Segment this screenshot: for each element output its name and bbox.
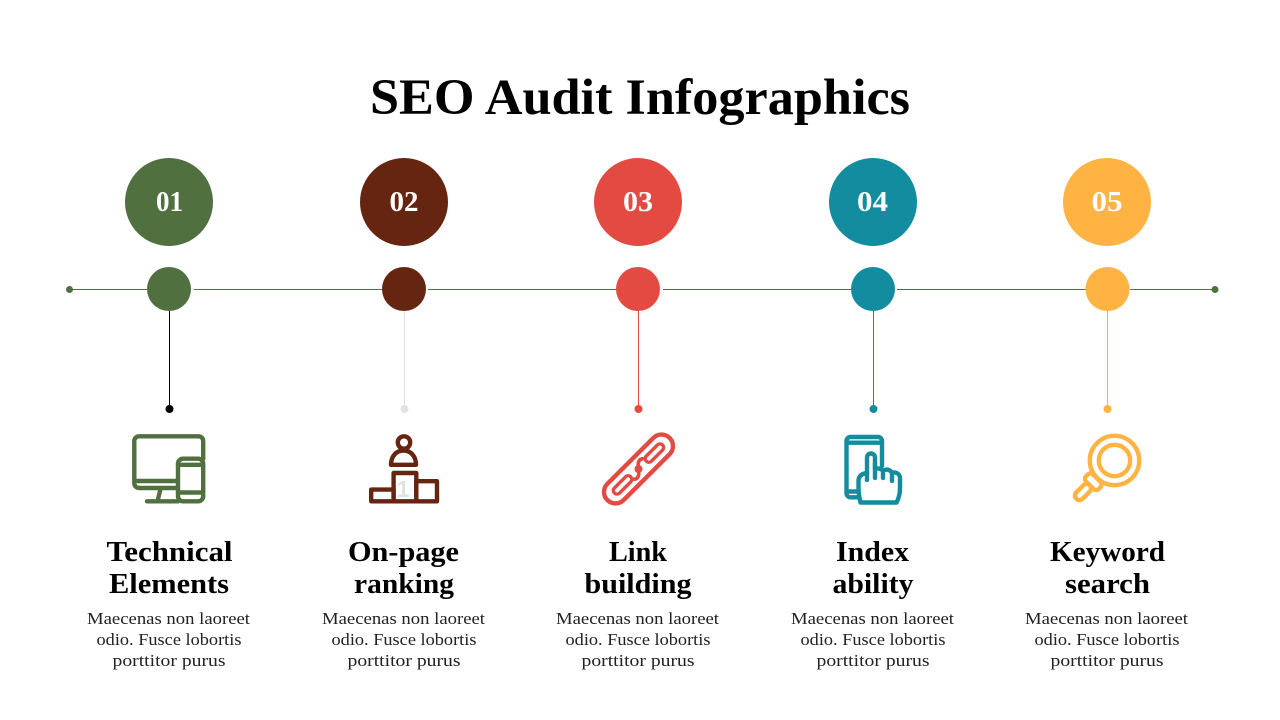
- description 3: [556, 609, 719, 670]
- heading 5: Keyword: [1050, 537, 1165, 568]
- number badge 05: 05: [1092, 186, 1122, 218]
- description 1: porttitor purus: [112, 651, 226, 670]
- description 1: Maecenas non laoreet: [87, 609, 250, 628]
- description 4: porttitor purus: [816, 651, 930, 670]
- timeline node and connector 3: [616, 267, 660, 413]
- heading 1: [106, 537, 233, 600]
- heading 4: ability: [832, 569, 914, 600]
- heading 2: ranking: [354, 569, 454, 600]
- timeline node and connector 1: [147, 267, 191, 413]
- heading 3: [584, 537, 692, 600]
- description 2: odio. Fusce lobortis: [332, 630, 476, 649]
- number badge 04: 04: [857, 186, 888, 218]
- description 5: Maecenas non laoreet: [1025, 609, 1188, 628]
- step 1: Technical Elements: [87, 158, 250, 670]
- description 4: [791, 609, 954, 670]
- description 4: odio. Fusce lobortis: [800, 630, 946, 649]
- number badge 03: [594, 158, 682, 246]
- step 3: Link building: [556, 158, 719, 670]
- heading 2: [348, 537, 459, 600]
- description 2: [322, 609, 485, 670]
- heading 3: Link: [609, 537, 667, 568]
- heading 5: search: [1065, 569, 1150, 600]
- timeline line: [66, 286, 1218, 293]
- number badge 04: [829, 158, 917, 246]
- description 1: [87, 609, 250, 670]
- icon: magnifying glass: [1059, 426, 1149, 516]
- step 2: On-page ranking: [322, 158, 485, 670]
- timeline node and connector 2: [382, 267, 426, 413]
- heading 4: [832, 537, 914, 600]
- heading 2: On-page: [348, 537, 459, 568]
- icon: monitor and phone: [134, 436, 203, 501]
- description 5: [1025, 609, 1188, 670]
- icon: chain link: [599, 430, 678, 508]
- number badge 01: 01: [156, 186, 183, 218]
- heading 3: building: [584, 569, 692, 600]
- number badge 03: 03: [623, 186, 653, 218]
- title: SEO Audit Infographics: [370, 70, 910, 126]
- step 4: Index ability: [791, 158, 954, 670]
- description 3: porttitor purus: [582, 651, 694, 670]
- timeline node and connector 5: [1086, 267, 1130, 413]
- heading 1: Elements: [109, 569, 229, 600]
- icon: podium: [371, 436, 437, 502]
- description 2: porttitor purus: [348, 651, 460, 670]
- number badge 02: 02: [390, 186, 418, 218]
- heading 5: [1050, 537, 1165, 600]
- timeline node and connector 4: [851, 267, 895, 413]
- description 5: porttitor purus: [1050, 651, 1164, 670]
- number badge 01: [125, 158, 213, 246]
- description 4: Maecenas non laoreet: [791, 609, 954, 628]
- step 5: Keyword search: [1025, 158, 1188, 670]
- number badge 05: [1063, 158, 1151, 246]
- description 5: odio. Fusce lobortis: [1034, 630, 1180, 649]
- description 3: odio. Fusce lobortis: [566, 630, 710, 649]
- icon: podium: 1: [397, 476, 410, 502]
- number badge 02: [360, 158, 448, 246]
- description 3: Maecenas non laoreet: [556, 609, 719, 628]
- heading 1: Technical: [106, 537, 233, 568]
- description 1: odio. Fusce lobortis: [96, 630, 242, 649]
- icon: hand tapping phone: [846, 437, 900, 502]
- description 2: Maecenas non laoreet: [322, 609, 485, 628]
- heading 4: Index: [836, 537, 909, 568]
